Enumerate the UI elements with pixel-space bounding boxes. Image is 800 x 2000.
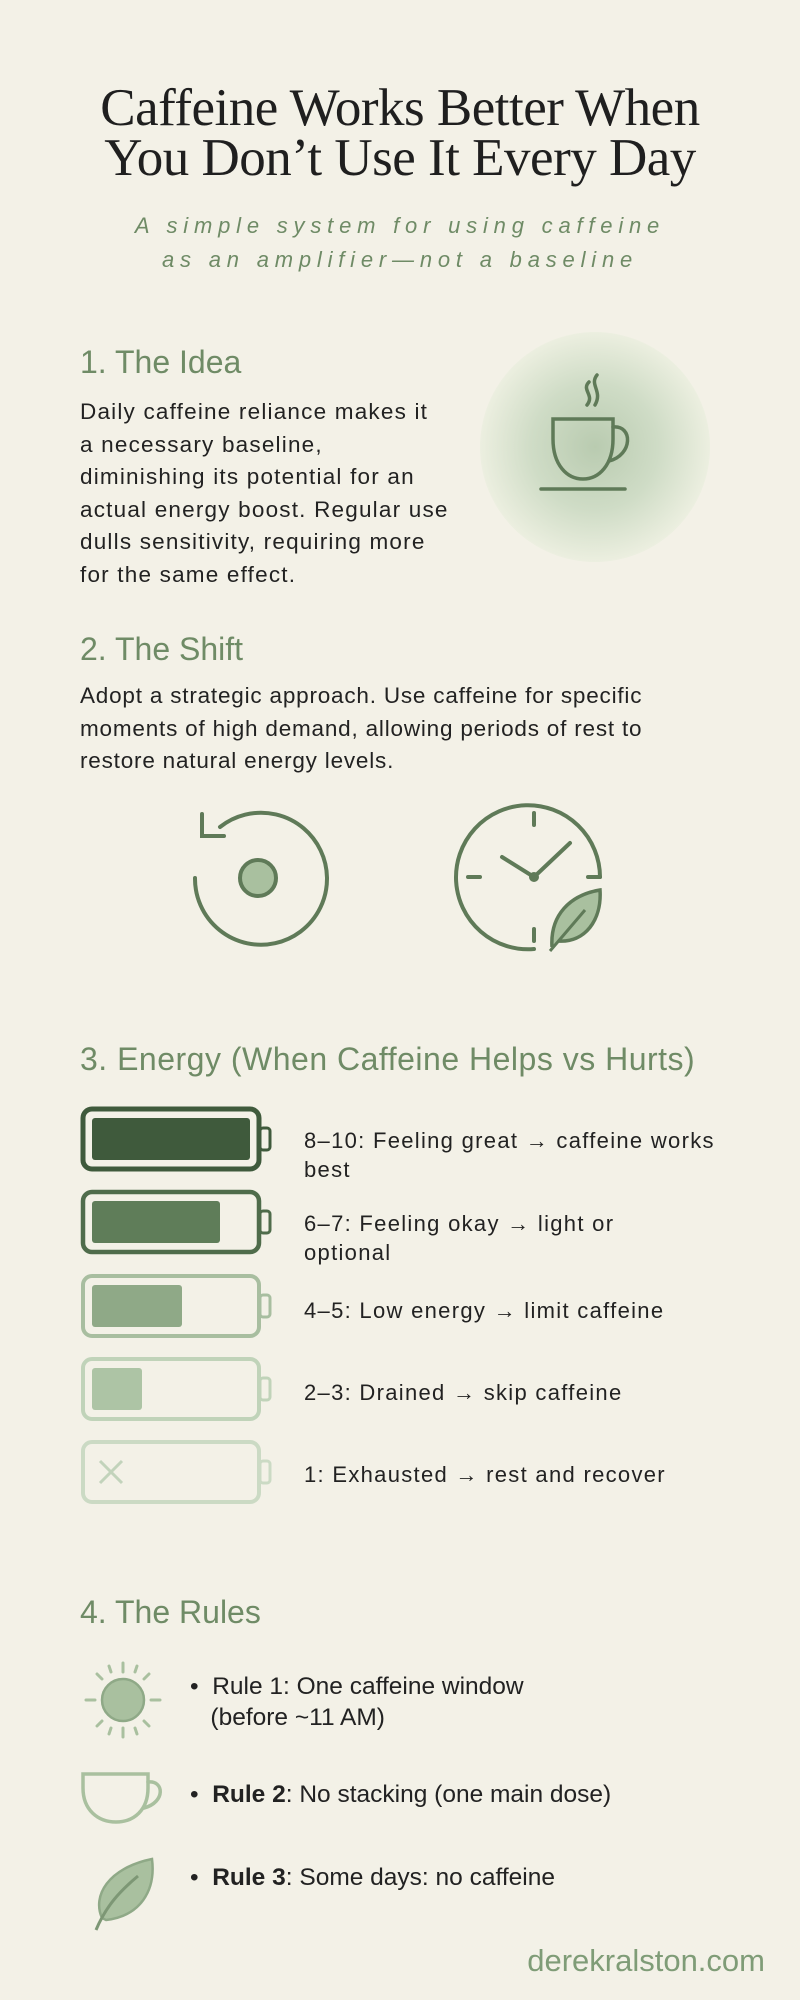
text: rule 1: (before ~11 AM) [210, 1704, 385, 1731]
subtitle: as an amplifier—not a baseline [162, 247, 638, 272]
text: rule 1: • Rule 1: One caffeine window [190, 1673, 524, 1700]
text: shift body: Adopt a strategic approach. Use caffeine for specific moments of high demand, allowing periods of rest to restore natural energy levels. [80, 683, 642, 773]
text: 2-3: 2–3: Drained → skip caffeine [304, 1380, 622, 1405]
text: idea body: diminishing its potential for an [80, 464, 415, 489]
text: idea body: dulls sensitivity, requiring more [80, 529, 426, 554]
text: rule 1 [190, 1673, 524, 1731]
text: 1: 1: Exhausted → rest and recover [304, 1462, 666, 1487]
text: idea body: for the same effect. [80, 562, 296, 586]
text: idea body: Daily caffeine reliance makes it [80, 399, 428, 424]
heading: 2. The Shift: 2. The Shift [80, 631, 243, 667]
footer url: derekralston.com [527, 1943, 765, 1978]
battery 2 [80, 1190, 272, 1254]
text: 8-10: 8–10: Feeling great → caffeine works best [304, 1128, 715, 1182]
title [100, 79, 700, 187]
icon: cup [81, 1772, 162, 1824]
icon: sun [84, 1662, 162, 1738]
heading: 4. The Rules: 4. The Rules [80, 1594, 261, 1630]
battery 3 [81, 1274, 272, 1338]
battery 1 [80, 1106, 272, 1172]
text: 4-5: 4–5: Low energy → limit caffeine [304, 1298, 664, 1323]
battery 5 [81, 1440, 272, 1504]
battery 4 [81, 1357, 272, 1421]
icon: clock with leaf [454, 803, 602, 952]
subtitle: A simple system for using caffeine [135, 213, 665, 238]
text: idea body: actual energy boost. Regular use [80, 496, 449, 522]
subtitle [134, 213, 665, 272]
text: rule 2: • Rule 2: No stacking (one main dose) [190, 1781, 611, 1808]
text: idea body: a necessary baseline, [80, 432, 323, 456]
text: rule 3: • Rule 3: Some days: no caffeine [190, 1864, 555, 1891]
icon: reset cycle [193, 810, 329, 947]
text: 6-7: 6–7: Feeling okay → light or optional [304, 1211, 614, 1265]
heading: 3. Energy: 3. Energy (When Caffeine Helps vs Hurts) [80, 1041, 695, 1077]
heading: 1. The Idea: 1. The Idea [80, 344, 241, 380]
text: idea body [80, 399, 449, 586]
icon: coffee cup in glowing circle [482, 334, 708, 560]
icon: leaf [94, 1858, 154, 1931]
title: Caffeine Works Better When [100, 79, 700, 137]
title: You Don’t Use It Every Day [104, 129, 696, 187]
